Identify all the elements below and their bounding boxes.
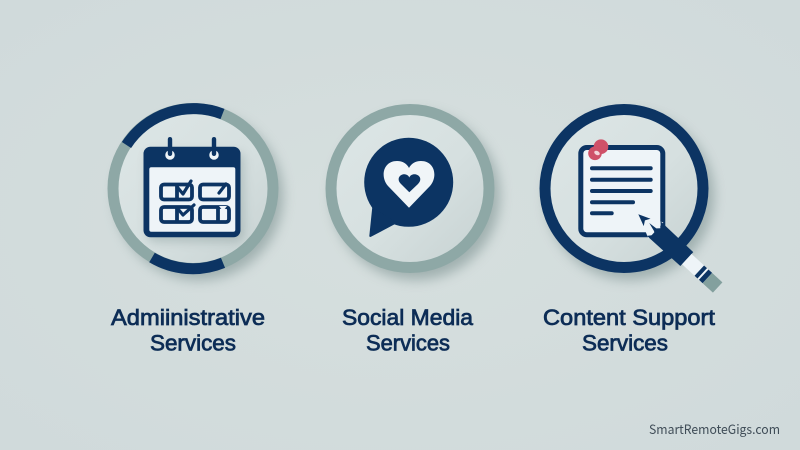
heading: content support services: Content Support xyxy=(543,305,715,330)
icon: calendar with checkboxes xyxy=(144,137,244,242)
panel: social media services xyxy=(331,110,500,280)
heading: content support services: Services xyxy=(582,330,668,356)
heading: administrative services: Services xyxy=(150,330,236,356)
panel: administrative services xyxy=(113,108,283,280)
heading: social media services: Social Media xyxy=(342,305,474,330)
ring: social media xyxy=(331,110,500,280)
footer: website credit: SmartRemoteGigs.com xyxy=(649,419,780,438)
heading: administrative services xyxy=(111,305,265,356)
icon: document with lines xyxy=(581,148,663,235)
icon: red pin xyxy=(588,139,608,160)
ring: content support xyxy=(545,110,714,280)
heading: social media services xyxy=(342,305,474,356)
panel: content support services xyxy=(545,110,725,296)
ring: administrative xyxy=(113,108,283,280)
icon: speech bubble with heart xyxy=(364,138,453,237)
heading: administrative services: Admiinistrative xyxy=(111,305,265,330)
icon: pencil xyxy=(631,206,725,296)
heading: content support services xyxy=(543,305,715,356)
heading: social media services: Services xyxy=(366,330,450,356)
